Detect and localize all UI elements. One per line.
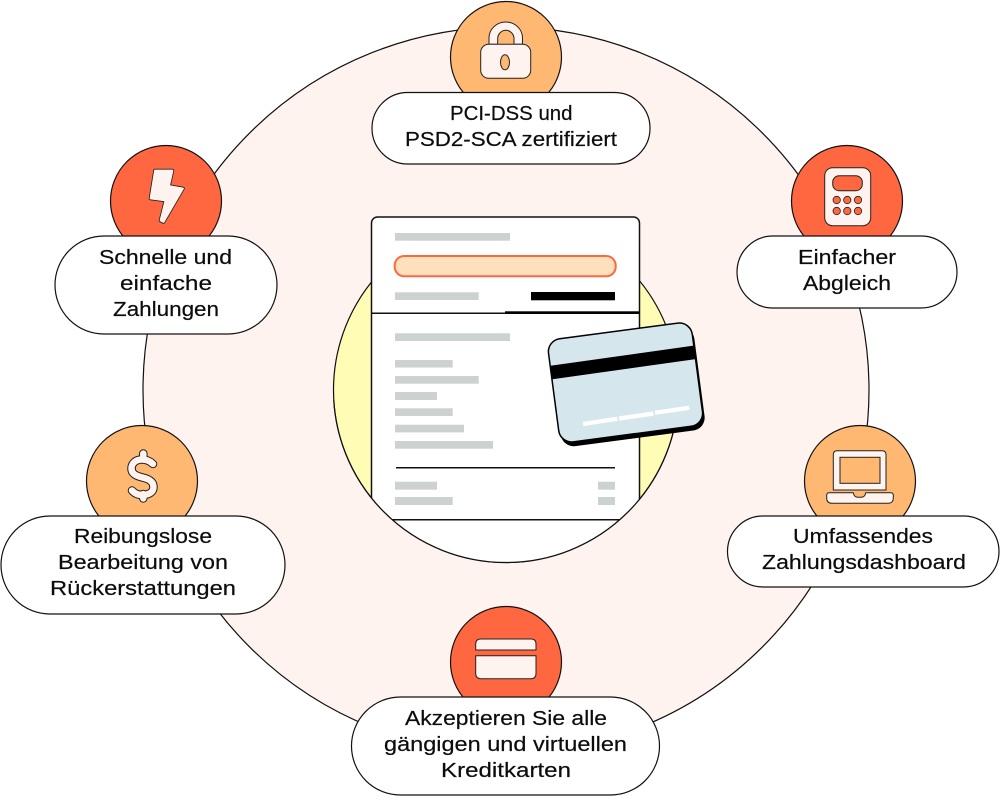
icon: calculator [792,146,902,256]
label pill: gängigen und virtuellen [384,733,627,756]
central illustration: invoice and credit card [332,216,705,564]
label pill: PSD2-SCA zertifiziert [405,128,617,151]
label pill: Kreditkarten [441,759,571,782]
icon: laptop [804,426,916,536]
icon: padlock [450,2,562,112]
label pill: Rückerstattungen [50,577,236,600]
label pill [1,516,285,614]
icon: lightning bolt [110,146,222,256]
label pill [55,236,277,334]
item: credit cards [352,606,660,795]
invoice document [333,216,674,564]
item: PCI-DSS certification [372,2,650,164]
background ring circle [143,27,869,753]
item: fast payments [55,146,277,334]
label pill: Abgleich [803,272,891,295]
label pill: Zahlungen [113,298,219,321]
label pill [737,236,957,308]
label pill: Schnelle und [99,246,232,269]
label pill [372,92,650,164]
icon: dollar sign [86,426,198,536]
yellow backdrop circle [334,218,678,562]
label pill: Einfacher [798,246,896,269]
label pill: Akzeptieren Sie alle [405,707,607,730]
icon: bank card [450,606,562,718]
label pill: PCI-DSS und [450,102,572,125]
label pill [728,516,999,587]
credit card [547,321,706,448]
label pill: Bearbeitung von [58,551,228,574]
item: refunds [1,426,285,614]
label pill: Zahlungsdashboard [762,551,966,574]
item: easy reconciliation [737,146,957,308]
item: payment dashboard [728,426,999,587]
label pill: Umfassendes [793,525,933,548]
label pill: Reibungslose [74,525,212,548]
label pill: einfache [120,272,212,295]
label pill [352,697,660,795]
